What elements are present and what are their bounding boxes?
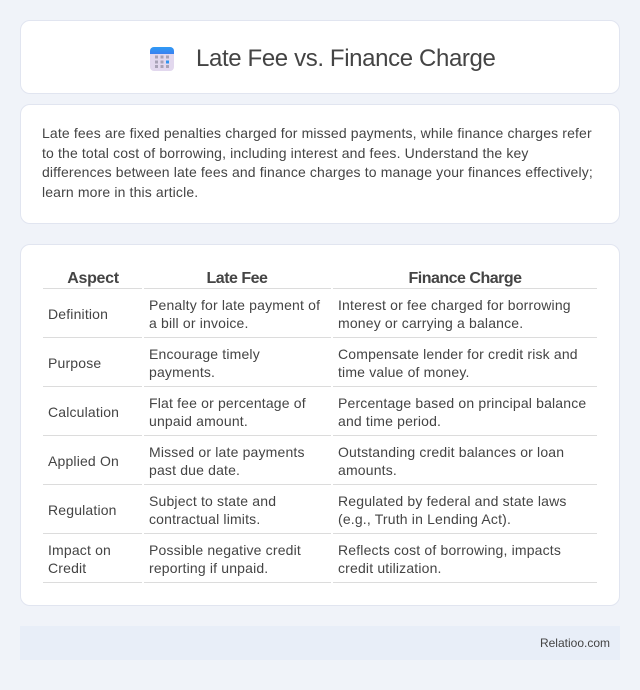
row 1: definition: Definition [48,306,108,322]
text block: introduction: to the total cost of borrowing, including interest and fees. Understand the key [42,145,529,161]
table header: aspect: Aspect [67,270,119,287]
row 6: late fee [149,542,301,576]
row 3: finance charge: and time period. [338,413,441,429]
row 1: finance charge: money or carrying a balance. [338,315,523,331]
panel: introduction [20,104,620,224]
row 4: late fee: Missed or late payments [149,444,305,460]
row 2: late fee [149,346,260,380]
row 3: finance charge: Percentage based on principal balance [338,395,586,411]
row 6: finance charge: credit utilization. [338,560,442,576]
row 5: regulation: Regulation [48,502,117,518]
row 6: finance charge [338,542,561,576]
panel: title card [20,20,620,94]
row 2: finance charge [338,346,578,380]
text block: introduction: learn more in this article. [42,184,198,200]
row 4: applied on: Applied On [48,453,119,469]
row 5: finance charge [338,493,567,527]
row 2: late fee: payments. [149,364,215,380]
row 6: finance charge: Reflects cost of borrowing, impacts [338,542,561,558]
row 1: late fee: a bill or invoice. [149,315,249,331]
text block: introduction: differences between late fees and finance charges to manage your finances effectively; [42,164,593,180]
row 4: finance charge [338,444,564,478]
row 3: late fee: unpaid amount. [149,413,248,429]
row 5: late fee [149,493,276,527]
row 6: impact on credit: Credit [48,560,86,576]
row 3: calculation: Calculation [48,404,119,420]
row 4: late fee [149,444,305,478]
row 1: finance charge [338,297,571,331]
title: Late Fee vs. Finance Charge [196,45,496,72]
row 1: finance charge: Interest or fee charged for borrowing [338,297,571,313]
row 4: finance charge: amounts. [338,462,397,478]
row 2: purpose: Purpose [48,355,101,371]
row 1: late fee [149,297,320,331]
text block: introduction [42,125,593,200]
footer text: Relatioo.com [540,636,610,650]
table header: late fee: Late Fee [207,270,267,287]
row 5: late fee: contractual limits. [149,511,260,527]
row 4: finance charge: Outstanding credit balances or loan [338,444,564,460]
row 5: late fee: Subject to state and [149,493,276,509]
icon: calendar [150,47,174,71]
panel: comparison table [20,244,620,606]
row 6: late fee: reporting if unpaid. [149,560,268,576]
row 5: finance charge: (e.g., Truth in Lending Act). [338,511,511,527]
row 6: late fee: Possible negative credit [149,542,301,558]
row 3: late fee [149,395,306,429]
footer bar [20,626,620,660]
row 6: impact on credit [48,542,111,576]
row 5: finance charge: Regulated by federal and state laws [338,493,567,509]
row 3: late fee: Flat fee or percentage of [149,395,306,411]
row 3: finance charge [338,395,586,429]
row 4: late fee: past due date. [149,462,240,478]
row 2: finance charge: time value of money. [338,364,470,380]
row 2: finance charge: Compensate lender for credit risk and [338,346,578,362]
row 1: late fee: Penalty for late payment of [149,297,320,313]
table header: finance charge: Finance Charge [408,270,522,287]
row 2: late fee: Encourage timely [149,346,260,362]
text block: introduction: Late fees are fixed penalties charged for missed payments, while finance charges refer [42,125,592,141]
row 6: impact on credit: Impact on [48,542,111,558]
